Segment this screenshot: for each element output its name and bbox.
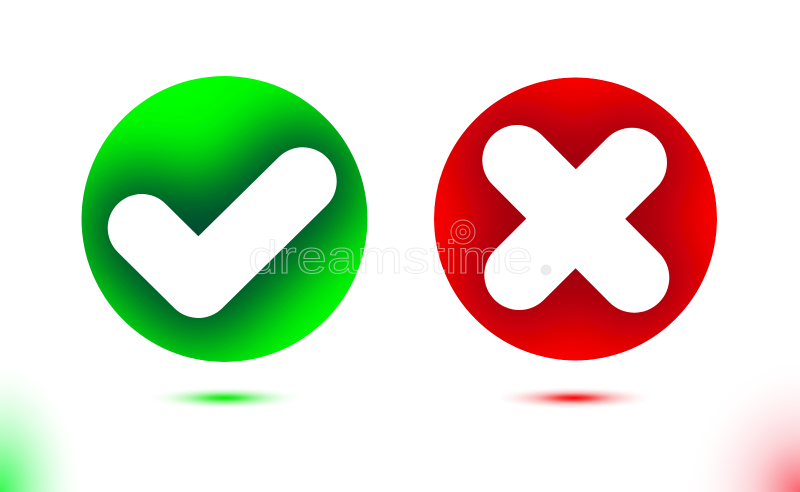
corner glow: red bottom right (680, 350, 800, 492)
red circle with dark inner glow (434, 78, 717, 360)
watermark text: dreamstime (248, 231, 533, 283)
icon: red cross badge (434, 78, 717, 360)
corner glow: green bottom left (0, 350, 90, 492)
green circle with dark inner glow (82, 76, 368, 362)
shadow: green ellipse (149, 387, 301, 409)
watermark (248, 220, 551, 283)
icon: green check badge (82, 76, 368, 362)
shadow: red ellipse (496, 387, 652, 409)
white check mark (142, 181, 303, 284)
watermark registered dot (541, 265, 551, 275)
watermark spiral (451, 220, 475, 244)
white cross mark (517, 160, 634, 278)
